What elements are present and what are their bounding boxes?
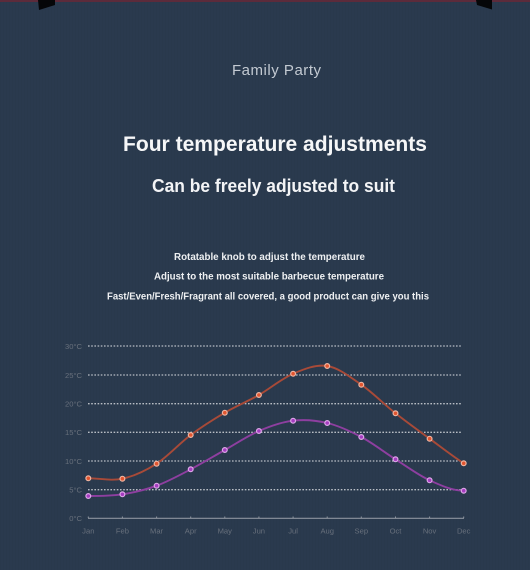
purple temperature line bbox=[88, 420, 464, 496]
y axis labels: 30°C bbox=[65, 342, 83, 351]
x axis labels: Sep bbox=[355, 526, 368, 536]
x axis labels: Dec bbox=[457, 526, 471, 536]
icon: right black ribbon bbox=[476, 0, 492, 10]
subheading: Can be freely adjusted to suit bbox=[152, 176, 395, 196]
y axis labels: 5°C bbox=[69, 486, 83, 494]
y axis labels bbox=[65, 342, 83, 523]
y axis labels: 15°C bbox=[65, 428, 83, 437]
description text: Rotatable knob to adjust the temperature bbox=[174, 252, 366, 263]
brand name: Family Party bbox=[232, 62, 322, 79]
x axis labels: Oct bbox=[390, 526, 402, 536]
y axis labels: 0°C bbox=[69, 514, 83, 523]
line chart: monthly temperature bbox=[65, 342, 471, 536]
x axis labels: Jul bbox=[288, 526, 298, 536]
y axis labels: 10°C bbox=[65, 457, 83, 466]
main heading: Four temperature adjustments bbox=[123, 132, 427, 156]
x axis labels: Apr bbox=[185, 526, 197, 536]
y axis labels: 20°C bbox=[65, 400, 83, 408]
top strip bbox=[0, 0, 530, 2]
x axis labels: Jun bbox=[253, 526, 265, 536]
x axis labels: Jan bbox=[82, 526, 94, 536]
description text: Adjust to the most suitable barbecue temperature bbox=[154, 272, 385, 282]
icon: left black ribbon bbox=[38, 0, 55, 10]
red data points bbox=[86, 364, 466, 481]
red temperature line bbox=[88, 366, 464, 480]
description text bbox=[107, 252, 430, 302]
x axis labels: Mar bbox=[150, 526, 164, 536]
purple data points bbox=[86, 418, 466, 498]
x axis labels: Aug bbox=[320, 526, 334, 536]
x axis labels bbox=[82, 526, 471, 536]
description text: Fast/Even/Fresh/Fragrant all covered, a good product can give you this bbox=[107, 292, 430, 302]
x axis bbox=[88, 516, 464, 518]
x axis labels: May bbox=[218, 526, 232, 536]
x axis labels: Nov bbox=[423, 526, 437, 536]
x axis labels: Feb bbox=[116, 526, 129, 536]
y axis labels: 25°C bbox=[65, 371, 83, 380]
